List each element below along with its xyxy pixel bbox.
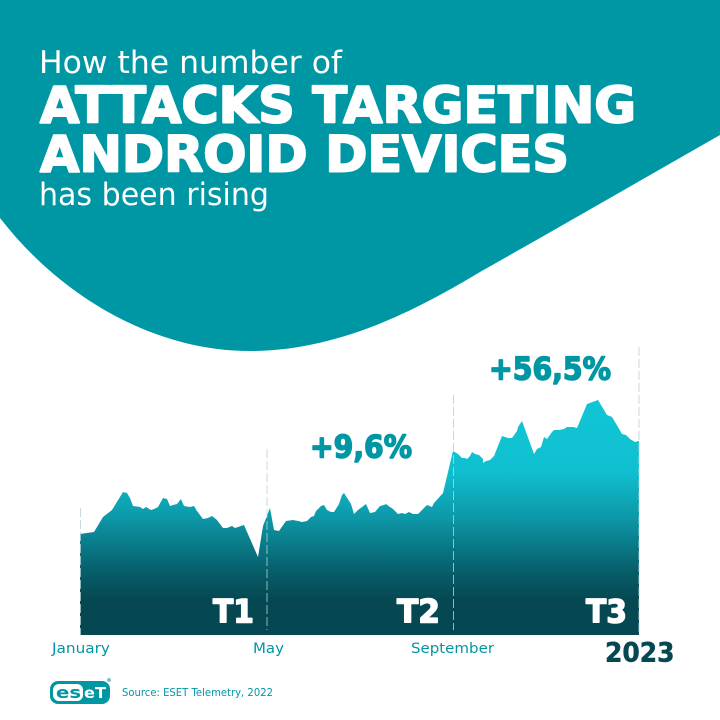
label January: January bbox=[51, 641, 110, 657]
title bbox=[39, 45, 636, 213]
percentage callouts bbox=[310, 352, 611, 466]
label May: May bbox=[253, 641, 284, 657]
ESET logo: es bbox=[56, 683, 81, 702]
period labels bbox=[213, 592, 627, 630]
label T3: T3 bbox=[586, 592, 627, 630]
ESET logo: eT bbox=[84, 684, 107, 702]
callout +9,6%: +9,6% bbox=[310, 430, 412, 466]
source note: Source: ESET Telemetry, 2022 bbox=[122, 687, 273, 699]
label September: September bbox=[411, 641, 494, 657]
ESET logo bbox=[50, 678, 111, 704]
callout +56,5%: +56,5% bbox=[489, 352, 611, 388]
axis month labels bbox=[51, 641, 494, 657]
period divider lines bbox=[80, 347, 639, 635]
label T1: T1 bbox=[213, 592, 254, 630]
title line: ATTACKS TARGETING: ATTACKS TARGETING bbox=[40, 77, 636, 135]
year label: 2023 bbox=[605, 638, 674, 668]
header background shape bbox=[0, 0, 720, 351]
title line: How the number of: How the number of bbox=[39, 45, 343, 81]
label T2: T2 bbox=[397, 592, 440, 630]
area chart bbox=[80, 400, 639, 635]
title line: ANDROID DEVICES: ANDROID DEVICES bbox=[40, 126, 569, 184]
title line: has been rising: has been rising bbox=[39, 177, 269, 213]
